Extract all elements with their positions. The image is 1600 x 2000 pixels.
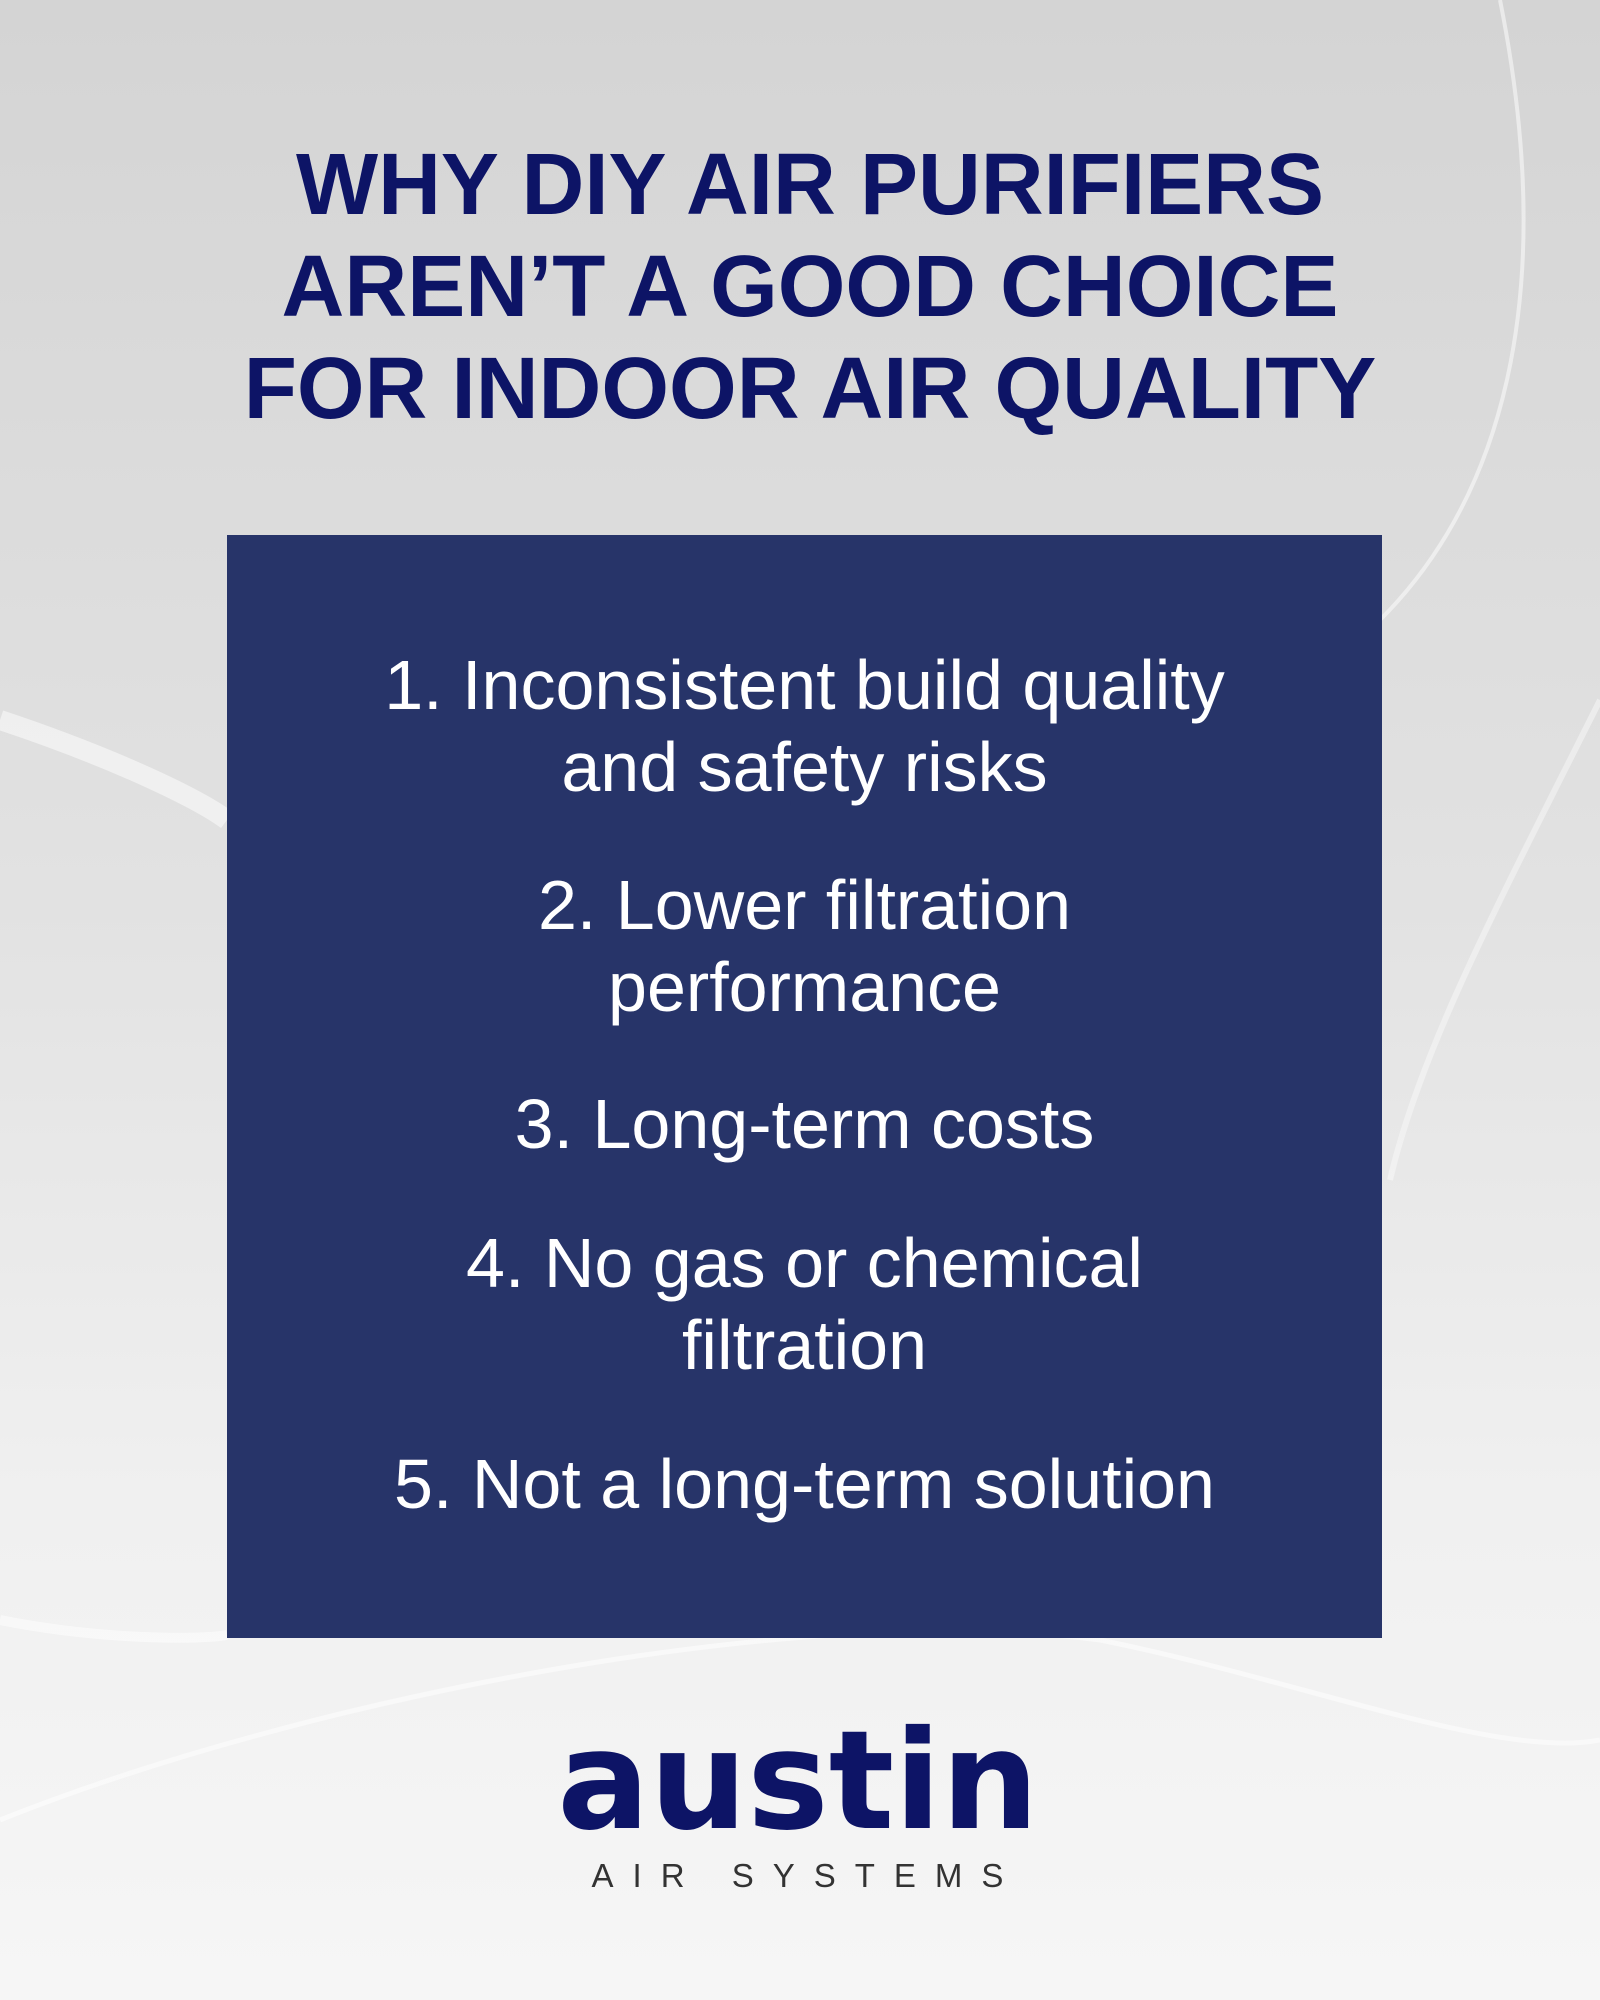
item 4 bbox=[466, 1224, 1143, 1384]
title: AREN’T A GOOD CHOICE bbox=[282, 238, 1338, 335]
item 5: 5. Not a long-term solution bbox=[394, 1445, 1215, 1523]
item 4: 4. No gas or chemical bbox=[466, 1224, 1143, 1302]
item 1: and safety risks bbox=[561, 728, 1048, 806]
item 3: 3. Long-term costs bbox=[515, 1085, 1094, 1163]
item 2 bbox=[538, 866, 1071, 1026]
panel: reasons list bbox=[227, 535, 1382, 1638]
item 2: performance bbox=[608, 948, 1001, 1026]
item 1: 1. Inconsistent build quality bbox=[384, 646, 1225, 724]
item 4: filtration bbox=[682, 1306, 927, 1384]
title: FOR INDOOR AIR QUALITY bbox=[244, 340, 1376, 437]
title: WHY DIY AIR PURIFIERS bbox=[296, 136, 1324, 233]
logo: austin air systems: AIR SYSTEMS bbox=[592, 1857, 1022, 1894]
title bbox=[244, 136, 1376, 437]
logo: austin air systems: austin bbox=[557, 1702, 1039, 1861]
item 1 bbox=[384, 646, 1225, 806]
item 2: 2. Lower filtration bbox=[538, 866, 1071, 944]
